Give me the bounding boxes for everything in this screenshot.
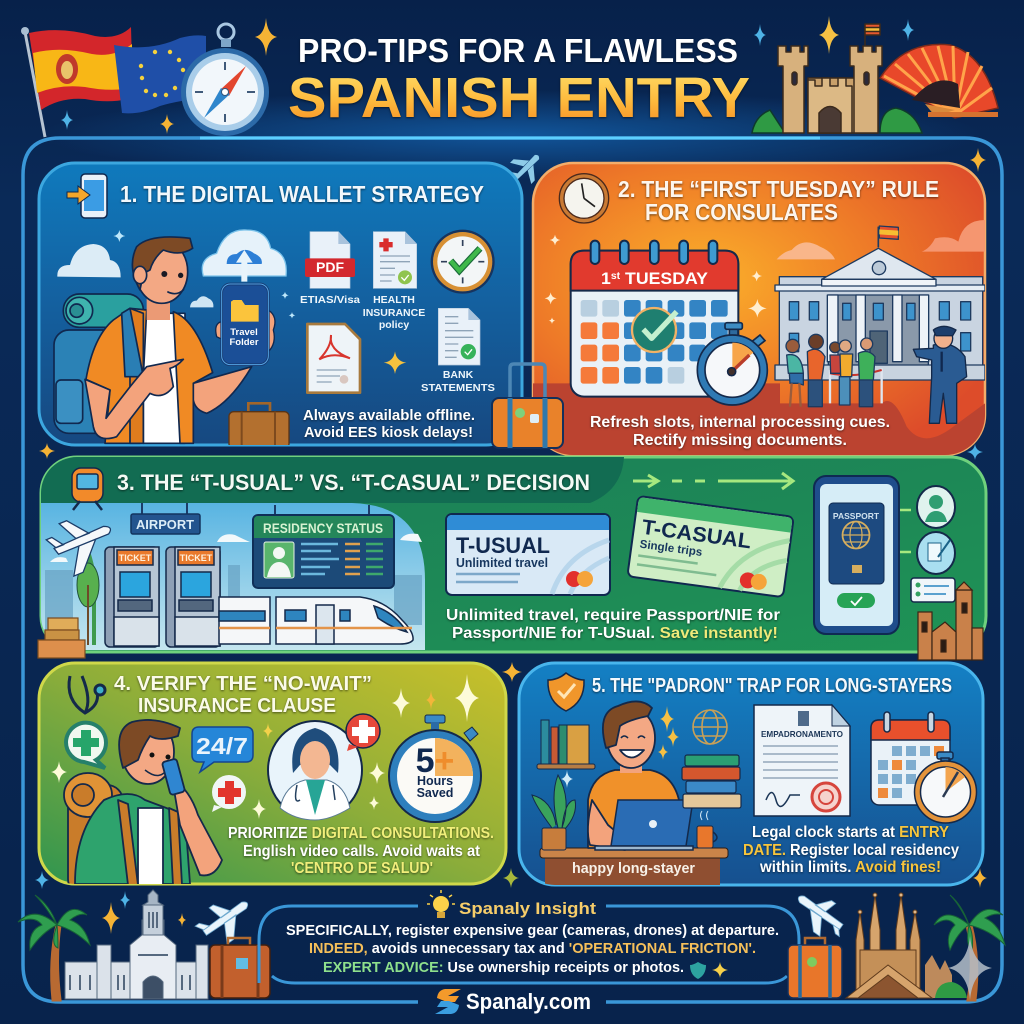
text: panel 3 caption: Passport/NIE for T-USual. Save instantly! <box>452 625 778 642</box>
icon: suitcase <box>788 938 842 998</box>
icon: castle <box>778 24 882 133</box>
panel: 4 no-wait insurance <box>39 663 506 895</box>
icon: train <box>72 468 103 510</box>
title line one: PRO-TIPS FOR A FLAWLESS <box>298 32 738 69</box>
ground <box>533 383 985 455</box>
panel: 1 digital wallet <box>39 163 522 448</box>
icon: backpack <box>54 294 143 433</box>
icon: 5+ hours stopwatch: Hours <box>417 774 453 788</box>
heading: panel 4: INSURANCE CLAUSE <box>138 695 336 717</box>
text: insight body: SPECIFICALLY, register expensive gear (cameras, drones) at departure. <box>286 922 779 939</box>
icon: high-speed train <box>219 597 413 644</box>
icon: Spanish flag <box>29 27 133 110</box>
header illustration: castle and fan <box>752 24 998 133</box>
icon: airport sign: AIRPORT <box>136 518 194 532</box>
sparkles <box>561 706 679 788</box>
icon: Sagrada Familia <box>846 893 952 998</box>
sparkles <box>102 891 186 934</box>
T-Usual card: T-USUAL <box>456 533 550 558</box>
icon: potted plant <box>532 775 576 850</box>
icon: smartphone travel folder <box>216 284 275 365</box>
kiosk labels <box>119 553 213 563</box>
text: panel 3 caption <box>446 607 780 642</box>
icon: brown suitcase <box>229 403 289 448</box>
icon: stethoscope <box>69 676 105 713</box>
icon: phone with arrow <box>67 174 107 218</box>
residency status board: RESIDENCY STATUS <box>263 521 383 536</box>
icon: plane between panels <box>503 145 549 191</box>
text: panel 4 caption: PRIORITIZE DIGITAL CONSULTATIONS. <box>228 825 494 842</box>
icon: 24/7 bubble: 24/7 <box>196 733 248 759</box>
empadronamiento document <box>754 705 850 816</box>
calendar label: 1 <box>601 269 610 288</box>
icon: palace <box>65 890 208 999</box>
brand name: Spanaly.com <box>466 989 591 1014</box>
T-Casual card <box>627 496 794 597</box>
text: panel 5 caption <box>743 824 959 876</box>
T-Usual card: Unlimited travel <box>456 556 548 570</box>
icon: calendar <box>571 241 738 397</box>
document labels: HEALTH <box>373 294 415 306</box>
desk label: happy long-stayer <box>572 860 695 877</box>
illustration: traveler <box>85 237 252 443</box>
desk <box>540 848 728 886</box>
T-Casual card: T-CASUAL <box>640 516 753 553</box>
title <box>288 32 750 130</box>
text: panel 5 caption: Legal clock starts at ENTRY <box>752 824 950 841</box>
icon: left palm <box>18 895 90 1000</box>
illustration: doctor <box>268 721 362 820</box>
icon: coffee mug <box>697 811 717 848</box>
icon: consulate building <box>775 226 985 380</box>
icon: laptop <box>595 800 693 850</box>
document labels <box>300 294 495 394</box>
icon: clock <box>559 174 609 223</box>
residency status board <box>253 505 394 588</box>
icon: globe <box>693 710 727 744</box>
icon: folding fan <box>880 44 998 118</box>
sparkle: grey watermark <box>948 936 992 1000</box>
heading: panel 1: 1. THE DIGITAL WALLET STRATEGY <box>120 181 484 207</box>
footer: Madrid illustration <box>18 888 270 1000</box>
icon: stone blocks <box>38 618 85 658</box>
document labels: INSURANCE <box>363 307 425 319</box>
icon: plane <box>42 507 122 581</box>
kiosk labels: TICKET <box>119 553 152 563</box>
icon: clock with check <box>431 230 495 294</box>
icon: user badge <box>900 486 955 552</box>
heading: panel 5: 5. THE "PADRON" TRAP FOR LONG-STAYERS <box>592 675 952 697</box>
text: panel 2 caption <box>590 414 890 449</box>
header illustration: Spanish flag, EU flag and compass <box>21 24 269 137</box>
kiosk labels: TICKET <box>180 553 213 563</box>
heading: panel 2 <box>618 176 939 225</box>
calendar label: st <box>611 271 621 282</box>
icon: small cloud <box>190 296 213 307</box>
text: insight body: INDEED, avoids unnecessary tax and 'OPERATIONAL FRICTION'. <box>309 940 756 957</box>
phone label: Travel <box>230 327 258 338</box>
logo: Spanaly.com <box>435 989 591 1014</box>
panel: 5 Padron trap <box>519 663 983 886</box>
header band <box>41 457 624 503</box>
footer: Barcelona illustration <box>787 884 1005 1000</box>
icon: red medical bubble <box>346 714 380 751</box>
text: panel 4 caption: English video calls. Avoid waits at <box>243 843 480 860</box>
text: panel 5 caption: DATE. Register local residency <box>743 842 959 859</box>
icon: left cloud <box>57 244 121 277</box>
text: panel 3 caption: Unlimited travel, require Passport/NIE for <box>446 607 780 624</box>
icon: bank statement document <box>438 308 480 365</box>
icon: small Spanish town <box>918 582 983 660</box>
heading: Spanaly Insight: Spanaly Insight <box>459 899 596 918</box>
icon: S logo <box>435 989 461 1014</box>
icon: light bulb <box>427 890 455 918</box>
heading: panel 3: 3. THE “T-USUAL” VS. “T-CASUAL” DECISION <box>117 470 590 495</box>
icon: European Union flag <box>114 35 206 113</box>
empadronamiento document: EMPADRONAMENTO <box>761 729 843 739</box>
text: panel 5 caption: within limits. Avoid fines! <box>759 859 941 876</box>
icon: clouds <box>777 220 985 259</box>
icon: acrobat document <box>307 324 360 393</box>
icon: orange suitcase <box>492 364 563 448</box>
illustration: security guard <box>913 326 967 423</box>
phone label: Folder <box>229 337 259 348</box>
text: panel 4 caption: 'CENTRO DE SALUD' <box>291 860 433 877</box>
icon: compass <box>181 24 269 136</box>
PDF label: PDF <box>316 259 344 275</box>
icon: plane <box>191 888 260 953</box>
heading: panel 4 <box>114 673 372 717</box>
icon: stopwatch <box>914 752 976 823</box>
sparkles <box>51 674 479 819</box>
icon: bookshelf <box>537 720 595 769</box>
phone label <box>229 327 259 348</box>
T-Usual card <box>446 514 610 595</box>
icon: plane <box>787 884 854 946</box>
document labels: STATEMENTS <box>421 382 495 394</box>
text: panel 4 caption <box>228 825 494 877</box>
icon: phone with passport <box>814 476 899 634</box>
panel: 2 first Tuesday <box>520 163 985 463</box>
icon: stopwatch <box>697 323 767 405</box>
icon: shield <box>548 673 584 711</box>
icon: health document <box>373 232 417 288</box>
text: insight body <box>286 922 779 976</box>
icon: checklist badge <box>917 532 955 574</box>
illustration: traveler on phone <box>64 720 222 895</box>
icon: bushes <box>752 108 922 133</box>
icon: ticket kiosks <box>105 547 220 647</box>
document labels: ETIAS/Visa <box>300 294 360 306</box>
document labels: BANK <box>443 369 474 381</box>
text: panel 2 caption: Refresh slots, internal processing cues. <box>590 414 890 431</box>
illustration: long-stayer on laptop <box>588 701 680 850</box>
sparkles <box>545 235 767 324</box>
icon: calendar <box>871 712 950 805</box>
icon: green cross bubble <box>66 723 106 768</box>
text: panel 1 caption <box>303 408 475 441</box>
heading: panel 2: 2. THE “FIRST TUESDAY” RULE <box>618 176 939 202</box>
icon: shield and sparkle <box>690 962 728 979</box>
icon: PDF document <box>305 232 355 288</box>
heading: panel 2: FOR CONSULATES <box>645 199 838 225</box>
icon: small card <box>911 578 955 602</box>
illustration: queue of people <box>786 334 882 407</box>
icon: right palm <box>934 895 1005 1000</box>
icon: airport sign <box>131 503 200 534</box>
panel: 3 T-Usual vs T-Casual <box>38 457 986 660</box>
sparkles <box>113 230 406 374</box>
icon: 5+ hours stopwatch <box>389 715 481 822</box>
icon: 5+ hours stopwatch: Saved <box>417 786 453 800</box>
icon: stacked books <box>682 755 741 808</box>
icon: flag pole <box>21 27 45 137</box>
icon: red cross bubble <box>212 775 246 812</box>
text: panel 1 caption: Always available offline. <box>303 408 475 424</box>
T-Casual card: Single trips <box>639 539 703 559</box>
icon: bush <box>935 982 967 998</box>
insight box <box>259 890 799 983</box>
icon: 24/7 bubble <box>192 727 253 772</box>
text: panel 2 caption: Rectify missing documents. <box>633 432 847 449</box>
title line two: SPANISH ENTRY <box>288 66 750 130</box>
icon: 5+ hours stopwatch: 5+ <box>416 742 454 780</box>
heading: panel 4: 4. VERIFY THE “NO-WAIT” <box>114 673 372 695</box>
text: panel 1 caption: Avoid EES kiosk delays! <box>304 425 473 441</box>
arrow: dashed <box>633 473 793 489</box>
icon: suitcase <box>210 938 270 998</box>
text: insight body: EXPERT ADVICE: Use ownership receipts or photos. <box>323 959 684 976</box>
sparkles: header <box>35 16 987 889</box>
icon: phone with passport: PASSPORT <box>833 511 880 521</box>
illustration: airport and train scene <box>41 503 425 650</box>
document labels: policy <box>379 319 409 331</box>
icon: top cloud with upload arrow <box>202 230 286 282</box>
calendar label: TUESDAY <box>620 269 709 288</box>
